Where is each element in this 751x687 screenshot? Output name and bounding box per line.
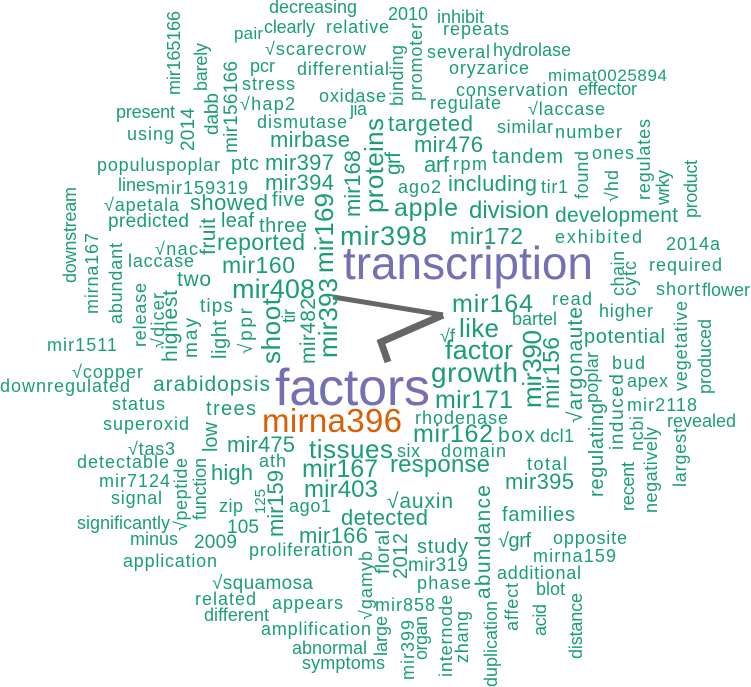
word: arf: arf bbox=[424, 152, 450, 177]
word: abundant: abundant bbox=[106, 243, 126, 324]
word: additional: additional bbox=[497, 563, 581, 583]
word: 2009: 2009 bbox=[194, 532, 237, 553]
word: squamosa: √squamosa bbox=[212, 573, 313, 594]
word: total: total bbox=[527, 454, 567, 474]
word: barely: barely bbox=[191, 43, 211, 91]
word: study: study bbox=[417, 536, 468, 558]
word: superoxid: superoxid bbox=[103, 414, 189, 434]
word: mirna167: mirna167 bbox=[82, 233, 102, 314]
word: reported: reported bbox=[217, 229, 305, 255]
word: lines: lines bbox=[118, 175, 155, 195]
word: trees: trees bbox=[206, 398, 256, 420]
word: peptide: √peptide bbox=[171, 458, 191, 531]
word: mirna396: mirna396 bbox=[262, 402, 402, 439]
word: low: low bbox=[200, 421, 222, 452]
word: may: may bbox=[181, 318, 202, 358]
word: domain: domain bbox=[441, 441, 506, 461]
word: ncbi: ncbi bbox=[627, 416, 647, 451]
word: binding: binding bbox=[387, 45, 407, 106]
word: box: box bbox=[498, 424, 536, 447]
word: function: function bbox=[190, 458, 210, 520]
word: ppr: √ppr bbox=[236, 307, 257, 354]
word: higher: higher bbox=[599, 301, 653, 321]
word: organ: organ bbox=[411, 616, 431, 660]
word: mir159319: mir159319 bbox=[155, 178, 248, 198]
word: families: families bbox=[502, 504, 575, 526]
word: mir399: mir399 bbox=[398, 620, 418, 680]
word: response: response bbox=[390, 451, 490, 478]
word: mir390: mir390 bbox=[517, 330, 547, 408]
word: mir2118: mir2118 bbox=[627, 395, 697, 415]
word: different: different bbox=[204, 605, 269, 625]
word: flower: flower bbox=[702, 280, 750, 300]
word: dcl1: dcl1 bbox=[540, 426, 574, 446]
word: five: five bbox=[272, 189, 305, 211]
word: two: two bbox=[177, 268, 211, 291]
word: mir168: mir168 bbox=[340, 150, 365, 217]
word: predicted: predicted bbox=[108, 211, 189, 232]
word: mimat0025894: mimat0025894 bbox=[548, 66, 667, 85]
word: negatively: negatively bbox=[641, 427, 661, 513]
word: mir172: mir172 bbox=[450, 223, 523, 249]
word: mir482: mir482 bbox=[297, 298, 320, 364]
word: differential: differential bbox=[297, 59, 389, 79]
word: poplar: poplar bbox=[582, 352, 602, 403]
word: six: six bbox=[397, 441, 420, 461]
word: transcription: transcription bbox=[343, 237, 593, 289]
word: ago1: ago1 bbox=[289, 496, 331, 516]
word: 2014a: 2014a bbox=[666, 234, 721, 254]
word: blot: blot bbox=[536, 579, 565, 599]
word: vegetative: vegetative bbox=[671, 301, 691, 391]
word: mir160: mir160 bbox=[222, 252, 295, 278]
word: internode: internode bbox=[436, 595, 456, 677]
word: regulate: regulate bbox=[430, 93, 501, 113]
word: mir397: mir397 bbox=[265, 150, 334, 175]
word: mir171: mir171 bbox=[435, 386, 513, 414]
word: appears: appears bbox=[272, 593, 343, 613]
word: produced: produced bbox=[695, 319, 715, 394]
icon: large root sign bbox=[333, 297, 443, 362]
word: ath: ath bbox=[259, 451, 286, 471]
word: hydrolase: hydrolase bbox=[493, 40, 571, 60]
word: potential: potential bbox=[584, 326, 665, 348]
word: effector: effector bbox=[578, 79, 637, 99]
word: factors: factors bbox=[275, 359, 430, 417]
word: affect: affect bbox=[502, 583, 522, 631]
word: grf: grf bbox=[382, 152, 405, 175]
word: phase: phase bbox=[417, 573, 471, 593]
word: leaf: leaf bbox=[221, 210, 254, 232]
word: mir408: mir408 bbox=[232, 274, 315, 304]
word: dicer: √dicer bbox=[148, 293, 168, 348]
word: ptc: ptc bbox=[231, 153, 259, 175]
word: mir162: mir162 bbox=[413, 420, 493, 448]
word: laccase: laccase bbox=[128, 251, 194, 271]
word: pair: pair bbox=[234, 24, 263, 43]
word: mirna159: mirna159 bbox=[533, 546, 616, 566]
word: exhibited: exhibited bbox=[555, 227, 642, 247]
word: tir1: tir1 bbox=[541, 177, 568, 197]
word: laccase: √laccase bbox=[528, 99, 605, 119]
word: abnormal: abnormal bbox=[292, 638, 367, 658]
word: 2010: 2010 bbox=[388, 4, 428, 24]
word: development: development bbox=[555, 204, 678, 227]
word: mir164: mir164 bbox=[452, 290, 533, 318]
word: argonaute: √argonaute bbox=[564, 307, 587, 423]
word: mir394: mir394 bbox=[265, 170, 334, 195]
word: populuspoplar: populuspoplar bbox=[97, 155, 220, 175]
word: largest: largest bbox=[670, 428, 690, 487]
word: tips: tips bbox=[200, 296, 233, 317]
word: symptoms: symptoms bbox=[302, 653, 385, 673]
word: zip: zip bbox=[219, 496, 243, 516]
word: mir319: mir319 bbox=[408, 555, 468, 576]
word: distance: distance bbox=[566, 593, 586, 659]
word: dismutase: dismutase bbox=[257, 112, 347, 132]
word: mirbase: mirbase bbox=[270, 127, 350, 152]
word: targeted: targeted bbox=[388, 111, 473, 136]
word: number: number bbox=[555, 122, 622, 142]
word: 2014: 2014 bbox=[178, 108, 199, 151]
word: tandem: tandem bbox=[492, 146, 563, 168]
word: division: division bbox=[469, 197, 549, 224]
word: conservation: conservation bbox=[456, 80, 568, 100]
word: auxin: √auxin bbox=[387, 490, 453, 513]
word: scarecrow: √scarecrow bbox=[265, 39, 367, 59]
word: tir: tir bbox=[279, 309, 299, 323]
word: induced: induced bbox=[607, 374, 628, 450]
word: tissues: tissues bbox=[309, 434, 393, 464]
word: minus: minus bbox=[130, 529, 178, 549]
word: using: using bbox=[127, 124, 174, 144]
word: related: related bbox=[195, 589, 256, 609]
word: arabidopsis: arabidopsis bbox=[153, 373, 270, 396]
word: product: product bbox=[681, 160, 701, 218]
word: stress: stress bbox=[242, 74, 295, 94]
word: three: three bbox=[259, 215, 307, 237]
word: shoot: shoot bbox=[256, 297, 286, 364]
word: cytc: cytc bbox=[620, 261, 640, 296]
word: hap2: √hap2 bbox=[240, 94, 295, 114]
word: f: √f bbox=[440, 326, 456, 346]
word: acid: acid bbox=[530, 604, 550, 636]
word: abundance: abundance bbox=[472, 485, 495, 599]
word: several: several bbox=[427, 42, 490, 62]
word: bartel: bartel bbox=[512, 309, 557, 329]
word: repeats: repeats bbox=[443, 19, 509, 39]
word: rhodenase: rhodenase bbox=[415, 408, 508, 428]
word: highest: highest bbox=[159, 290, 182, 362]
word: 105: 105 bbox=[227, 517, 259, 538]
word: detected: detected bbox=[341, 505, 428, 530]
word: 2012: 2012 bbox=[390, 533, 412, 579]
word: mir858: mir858 bbox=[375, 595, 435, 615]
word: found: found bbox=[572, 151, 592, 199]
word: relative: relative bbox=[326, 17, 389, 37]
word: opposite: opposite bbox=[553, 528, 627, 548]
word: mir475: mir475 bbox=[227, 432, 295, 457]
word: regulating: regulating bbox=[586, 403, 608, 497]
word: high: high bbox=[211, 460, 253, 485]
word: mir1511: mir1511 bbox=[47, 335, 117, 355]
word: jia: jia bbox=[349, 99, 368, 119]
word: application: application bbox=[123, 551, 217, 571]
word: light: light bbox=[209, 320, 231, 359]
word: hd: √hd bbox=[602, 170, 622, 202]
word: signal: signal bbox=[111, 488, 162, 508]
word: including: including bbox=[448, 171, 537, 196]
word: apetala: √apetala bbox=[104, 195, 180, 215]
word: 125: 125 bbox=[252, 489, 269, 514]
word: mir156: mir156 bbox=[538, 337, 564, 409]
word: proteins: proteins bbox=[359, 118, 389, 213]
word: pcr: pcr bbox=[250, 56, 275, 76]
word: showed: showed bbox=[190, 190, 268, 215]
word: present: present bbox=[116, 102, 175, 122]
word: duplication: duplication bbox=[481, 601, 501, 687]
word: mir169: mir169 bbox=[309, 193, 339, 273]
word: grf: √grf bbox=[498, 530, 531, 552]
word: downregulated: downregulated bbox=[0, 376, 130, 396]
word: mir159: mir159 bbox=[263, 470, 288, 537]
word: apex: apex bbox=[627, 371, 668, 391]
word: growth: growth bbox=[431, 357, 518, 388]
word: factor: factor bbox=[445, 335, 513, 365]
word: inhibit: inhibit bbox=[437, 7, 484, 27]
word: fruit: fruit bbox=[197, 218, 220, 255]
word: like: like bbox=[459, 313, 499, 343]
word: significantly: significantly bbox=[77, 513, 170, 533]
word: detectable: detectable bbox=[77, 452, 169, 472]
word: dabb: dabb bbox=[202, 93, 223, 135]
word: recent: recent bbox=[618, 462, 638, 511]
word: floral: floral bbox=[373, 530, 394, 574]
word: mir403: mir403 bbox=[304, 476, 378, 503]
word: downstream: downstream bbox=[60, 187, 80, 283]
word: apple: apple bbox=[394, 194, 458, 222]
word: read: read bbox=[552, 289, 592, 309]
word: status: status bbox=[112, 394, 165, 414]
word: oryzarice: oryzarice bbox=[449, 58, 529, 78]
word: amplification: amplification bbox=[261, 619, 371, 639]
word: proliferation: proliferation bbox=[249, 540, 353, 560]
word: mir395: mir395 bbox=[505, 469, 574, 494]
word: rpm: rpm bbox=[453, 154, 487, 174]
word: similar: similar bbox=[497, 117, 553, 137]
word: release: release bbox=[130, 283, 150, 347]
word: mir393: mir393 bbox=[313, 278, 343, 358]
word: wrky: wrky bbox=[653, 170, 673, 206]
word: chain: chain bbox=[608, 251, 628, 296]
word: regulates: regulates bbox=[634, 119, 654, 200]
word: ones: ones bbox=[592, 143, 634, 163]
word: mir156166: mir156166 bbox=[221, 61, 242, 153]
word: large: large bbox=[371, 616, 391, 656]
word: mir165166: mir165166 bbox=[164, 11, 184, 95]
word: zhang: zhang bbox=[452, 611, 472, 663]
word: ago2: ago2 bbox=[398, 177, 441, 197]
word: oxidase: oxidase bbox=[319, 86, 386, 106]
word: tas3: √tas3 bbox=[128, 439, 175, 459]
word: revealed: revealed bbox=[667, 411, 736, 431]
word: mir398: mir398 bbox=[340, 221, 427, 251]
word: copper: √copper bbox=[72, 362, 143, 382]
word: mir167: mir167 bbox=[302, 455, 378, 483]
word: mir166: mir166 bbox=[299, 523, 368, 548]
word: nac: √nac bbox=[155, 239, 198, 259]
word: mir476: mir476 bbox=[414, 132, 483, 157]
word: gamyb: √gamyb bbox=[356, 551, 376, 620]
word: clearly: clearly bbox=[264, 17, 315, 37]
word: required: required bbox=[649, 255, 722, 275]
word: short: short bbox=[656, 279, 700, 299]
word: promoter: promoter bbox=[406, 23, 426, 101]
word: bud: bud bbox=[612, 353, 645, 373]
word: mir7124: mir7124 bbox=[99, 471, 170, 491]
